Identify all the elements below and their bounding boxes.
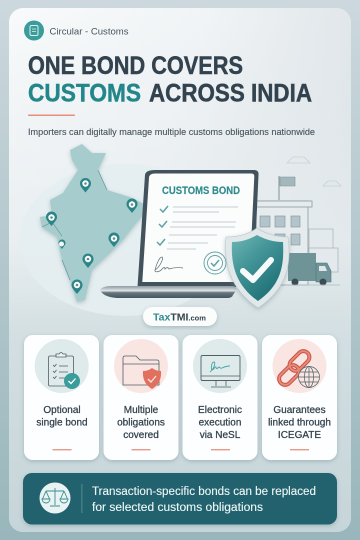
tag text: Circular - Customs [50,26,129,38]
label: via NeSL [200,430,241,441]
icon: scales [40,482,70,514]
label: linked through [268,418,331,428]
title: ONE BOND COVERS [28,52,243,80]
label: ICEGATE [278,430,321,441]
title: ACROSS INDIA [149,80,312,108]
title: CUSTOMS [28,80,141,108]
laptop screen [138,170,259,287]
card: guarantees ICEGATE [262,335,337,460]
callout text: Transaction-specific bonds can be replaced [92,486,316,498]
header tag [24,20,129,40]
callout banner [23,473,337,524]
divider [80,484,83,513]
truck [285,253,340,286]
accent [132,449,150,450]
subtitle: Importers can digitally manage multiple customs obligations nationwide [28,127,315,137]
title [28,52,312,108]
icon: monitor signature [193,339,247,393]
label: single bond [36,418,88,428]
label: Multiple [124,405,159,416]
icon: clipboard [35,339,89,393]
label: Guarantees [273,405,326,416]
label: covered [123,430,159,441]
icon: document badge [24,20,44,40]
accent [52,449,72,450]
document heading: CUSTOMS BOND [162,185,240,197]
callout banner: for selected customs obligations [92,502,263,514]
shield [226,228,289,308]
laptop base [100,286,237,298]
title underline [28,114,75,116]
card: optional single bond [24,335,99,460]
label: Optional [43,405,81,416]
signature [155,257,183,272]
customs building and truck [255,157,341,286]
seal [204,252,226,274]
illustration panel glow [20,164,230,316]
label: Electronic [198,405,242,416]
accent [211,449,230,450]
card: multiple obligations [104,335,178,460]
TaxTMI logo: TaxTMI.com [153,312,206,324]
card: electronic execution [182,335,258,460]
accent [290,449,309,450]
TaxTMI logo [143,307,217,326]
label: execution [199,418,241,428]
map pins [46,178,138,294]
checklist [157,206,238,249]
icon: chain and globe [272,339,326,393]
laptop [100,170,259,298]
label: obligations [117,418,165,428]
map of India [40,144,146,302]
icon: folder with shield [114,339,168,393]
